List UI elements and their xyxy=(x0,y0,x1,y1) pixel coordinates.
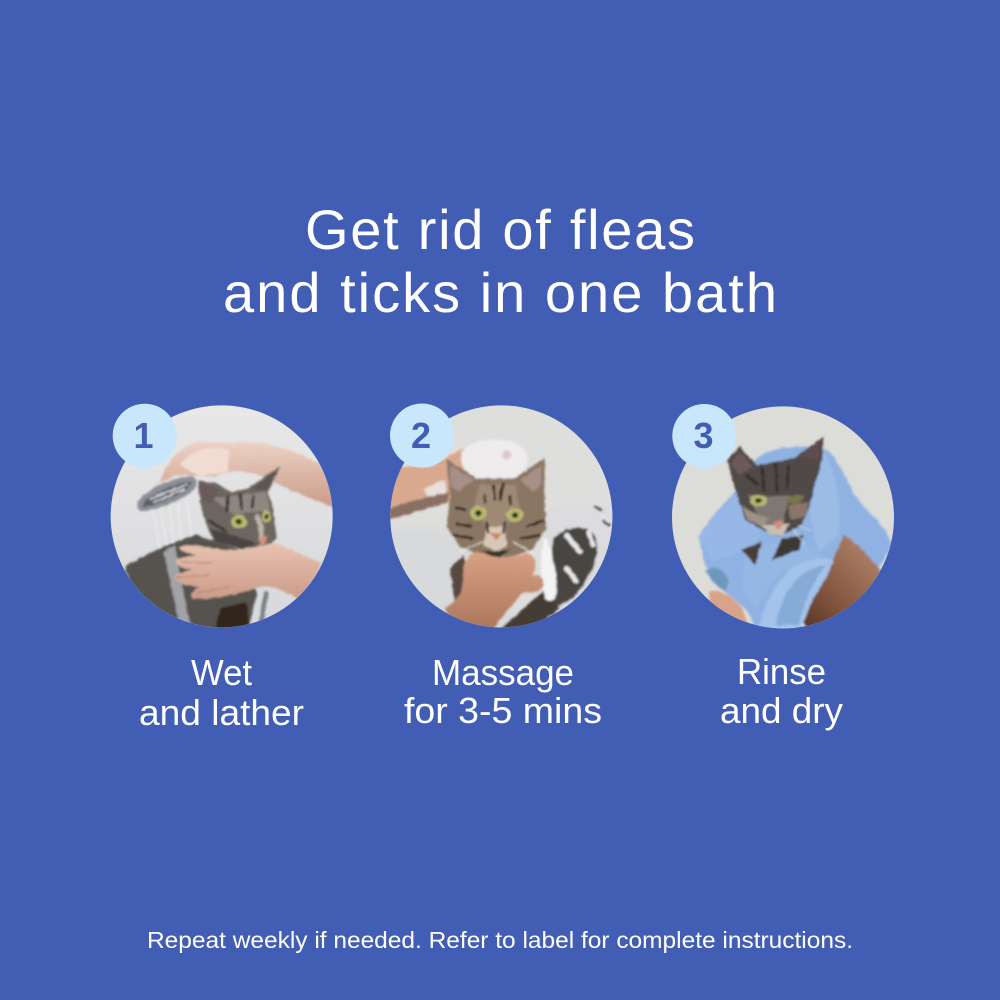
cat body with foam xyxy=(490,505,613,635)
title: and ticks in one bath xyxy=(223,261,777,324)
stripes xyxy=(208,493,253,532)
eyes xyxy=(751,495,767,506)
badge 1 xyxy=(113,404,177,468)
step 2 label xyxy=(404,652,602,731)
tub edge xyxy=(120,558,324,628)
step 2 label: Massage xyxy=(432,652,574,693)
lower hand xyxy=(175,543,322,602)
step 1 photo: cat under shower xyxy=(110,405,333,628)
step 2 label: for 3-5 mins xyxy=(404,690,602,731)
cat body xyxy=(125,535,257,635)
eyes xyxy=(470,506,486,520)
stripes xyxy=(452,483,545,538)
shower head xyxy=(137,477,197,511)
step 3 label xyxy=(720,651,843,731)
footer note: Repeat weekly if needed. Refer to label for complete instructions. xyxy=(147,927,853,953)
upper arm xyxy=(160,442,337,508)
step 1 label: and lather xyxy=(139,692,304,733)
title xyxy=(223,198,777,324)
cat head xyxy=(198,466,281,553)
left arm xyxy=(390,448,466,512)
hose xyxy=(260,592,267,632)
stripes xyxy=(745,463,789,493)
badge 2: 2 xyxy=(411,415,431,456)
step 3 label: Rinse xyxy=(737,651,826,692)
title: Get rid of fleas xyxy=(305,198,695,261)
hand under chin xyxy=(445,552,544,635)
step 1 label xyxy=(139,652,304,733)
water spray xyxy=(153,498,192,608)
cat head xyxy=(446,458,547,558)
step 3 photo: cat in towel xyxy=(672,406,894,628)
foam on head xyxy=(461,440,528,482)
towel xyxy=(699,446,892,628)
badge 2 xyxy=(390,404,454,468)
badge 3 xyxy=(672,404,736,468)
step 2 photo: cat with foam xyxy=(390,405,612,628)
badge 3: 3 xyxy=(693,415,714,456)
hands xyxy=(708,590,748,622)
badge 1: 1 xyxy=(133,415,154,456)
dark chest xyxy=(742,542,762,565)
step 3 label: and dry xyxy=(720,690,843,731)
cat head xyxy=(727,437,824,537)
eyes xyxy=(231,515,247,528)
step 1 label: Wet xyxy=(191,652,252,693)
foam leg xyxy=(541,538,557,601)
